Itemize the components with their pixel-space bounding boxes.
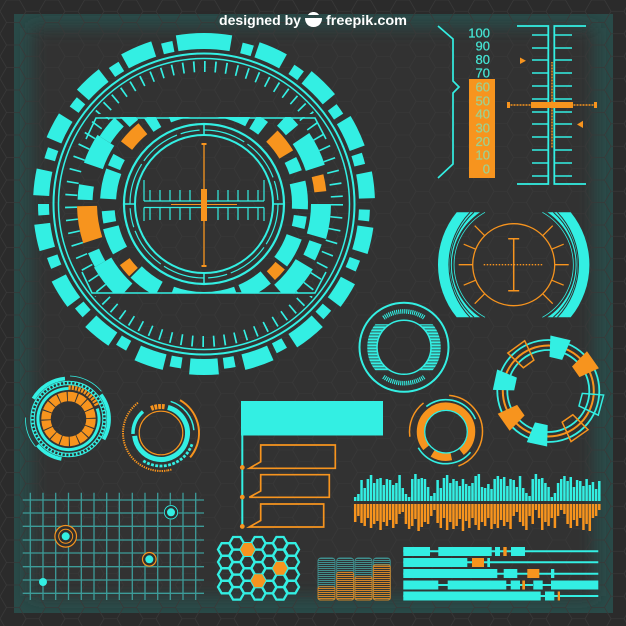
block ring [493,336,604,446]
outer band segments [77,117,331,292]
frame lines [82,118,326,293]
hexagon cluster [218,537,299,600]
striped ring [360,303,448,392]
level cylinders [318,558,390,600]
dotted ring [109,381,213,485]
timeline bars [403,547,598,600]
reticle with crescents [438,212,589,317]
scale numbers: 100 [468,26,490,40]
ladder ring [32,383,104,455]
crosshair scale [144,143,264,267]
scale numbers [468,26,490,176]
bracket [438,26,459,178]
scale numbers: 60 [476,80,490,94]
flag callouts [240,401,383,529]
scale numbers: 0 [483,162,490,176]
scale numbers: 50 [476,94,490,108]
row blocks [403,547,598,600]
scale numbers: 40 [476,106,490,122]
vertical gauge [507,26,597,184]
thin tracks [403,551,598,596]
number scale with bracket [438,26,495,178]
orange waveform [355,504,599,531]
outer segmented ring [41,41,367,367]
plotted grid [23,493,204,600]
ring blocks [493,336,604,446]
inner scope rings [124,124,284,284]
scale numbers: 20 [476,134,490,149]
title: designed by freepik [219,12,407,28]
title: designed by freepik: freepik.com [326,12,407,28]
orange value bar [469,79,495,178]
scale numbers: 10 [476,148,490,162]
grid markers [39,505,178,586]
gauge markers [520,58,583,128]
top and bottom tick marks [94,61,314,347]
double rings [54,54,354,354]
callout boxes [249,445,335,527]
targeting band clipped to frame [65,117,343,292]
orange gauge ring [401,387,491,477]
scale numbers: 80 [476,52,490,67]
reticle dial [459,224,569,306]
main radar dial [39,39,369,369]
flag banner [241,401,383,436]
title: designed by freepik: designed by [219,12,301,28]
scale numbers: 70 [476,66,490,80]
orange hexes [240,543,288,587]
left orange ring [8,358,129,480]
waveform bars [355,474,599,531]
inner band segments [100,117,308,292]
orange blocks [472,547,560,600]
scale numbers: 30 [476,120,490,136]
teal waveform [355,474,599,501]
scale numbers: 90 [476,38,490,54]
